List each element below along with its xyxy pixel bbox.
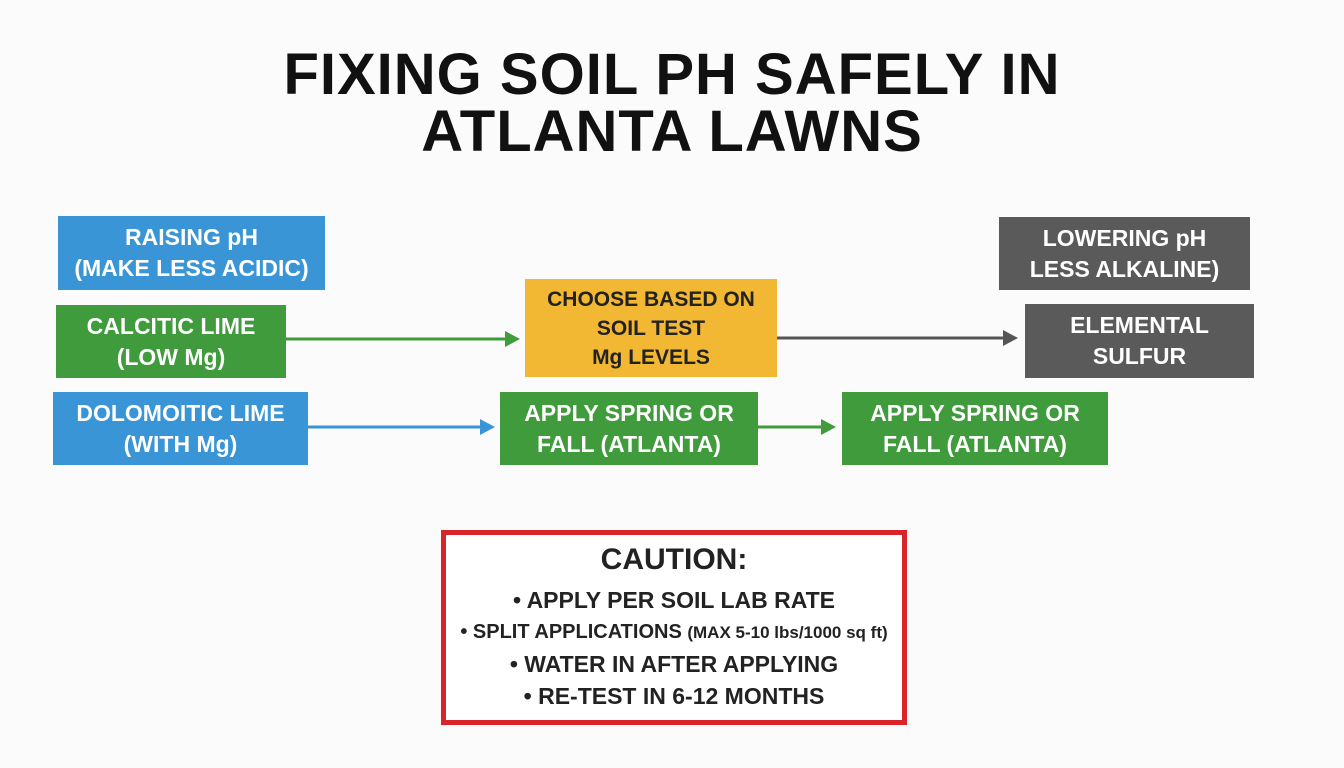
arrow: apply to apply (758, 419, 836, 435)
box: apply spring or fall 1: FALL (ATLANTA) (537, 430, 721, 456)
box: elemental sulfur: ELEMENTAL (1070, 312, 1209, 338)
title: FIXING SOIL PH SAFELY IN (283, 42, 1061, 107)
box: calcitic lime: (LOW Mg) (117, 344, 225, 370)
title (283, 42, 1061, 164)
box: apply spring or fall 2: FALL (ATLANTA) (883, 430, 1067, 456)
box: elemental sulfur (1025, 304, 1254, 378)
box: choose based on soil test: CHOOSE BASED ON (547, 288, 755, 310)
box: lowering pH: LOWERING pH (1043, 224, 1206, 250)
box: dolomitic lime (53, 392, 308, 465)
arrow: choose to sulfur (777, 330, 1018, 346)
caution bullets: • APPLY PER SOIL LAB RATE (513, 587, 835, 613)
box: apply spring or fall 2: APPLY SPRING OR (870, 400, 1080, 426)
box: calcitic lime: CALCITIC LIME (87, 312, 255, 338)
arrow: dolomitic to apply (308, 419, 495, 435)
box: lowering pH: LESS ALKALINE) (1030, 256, 1219, 282)
box: raising pH (58, 216, 325, 290)
caution bullets: • WATER IN AFTER APPLYING (510, 651, 838, 677)
box: choose based on soil test: Mg LEVELS (592, 346, 710, 368)
box: dolomitic lime: DOLOMOITIC LIME (76, 400, 285, 426)
caution bullets: • RE-TEST IN 6-12 MONTHS (524, 683, 824, 709)
box: elemental sulfur: SULFUR (1093, 343, 1186, 369)
box: choose based on soil test (525, 279, 777, 377)
box: raising pH: RAISING pH (125, 224, 258, 250)
caution box (441, 530, 907, 725)
box: calcitic lime (56, 305, 286, 378)
box: apply spring or fall 1 (500, 392, 758, 465)
caution bullets (460, 587, 888, 709)
title: ATLANTA LAWNS (421, 99, 923, 164)
caution heading: CAUTION: (601, 543, 747, 576)
box: apply spring or fall 2 (842, 392, 1108, 465)
box: apply spring or fall 1: APPLY SPRING OR (524, 400, 734, 426)
arrow: calcitic to choose (286, 331, 520, 347)
box: dolomitic lime: (WITH Mg) (124, 430, 237, 456)
box: raising pH: (MAKE LESS ACIDIC) (74, 255, 309, 281)
box: lowering pH (999, 217, 1250, 290)
box: choose based on soil test: SOIL TEST (597, 316, 705, 340)
caution bullets: • SPLIT APPLICATIONS (MAX 5-10 lbs/1000 sq ft) (460, 621, 888, 643)
